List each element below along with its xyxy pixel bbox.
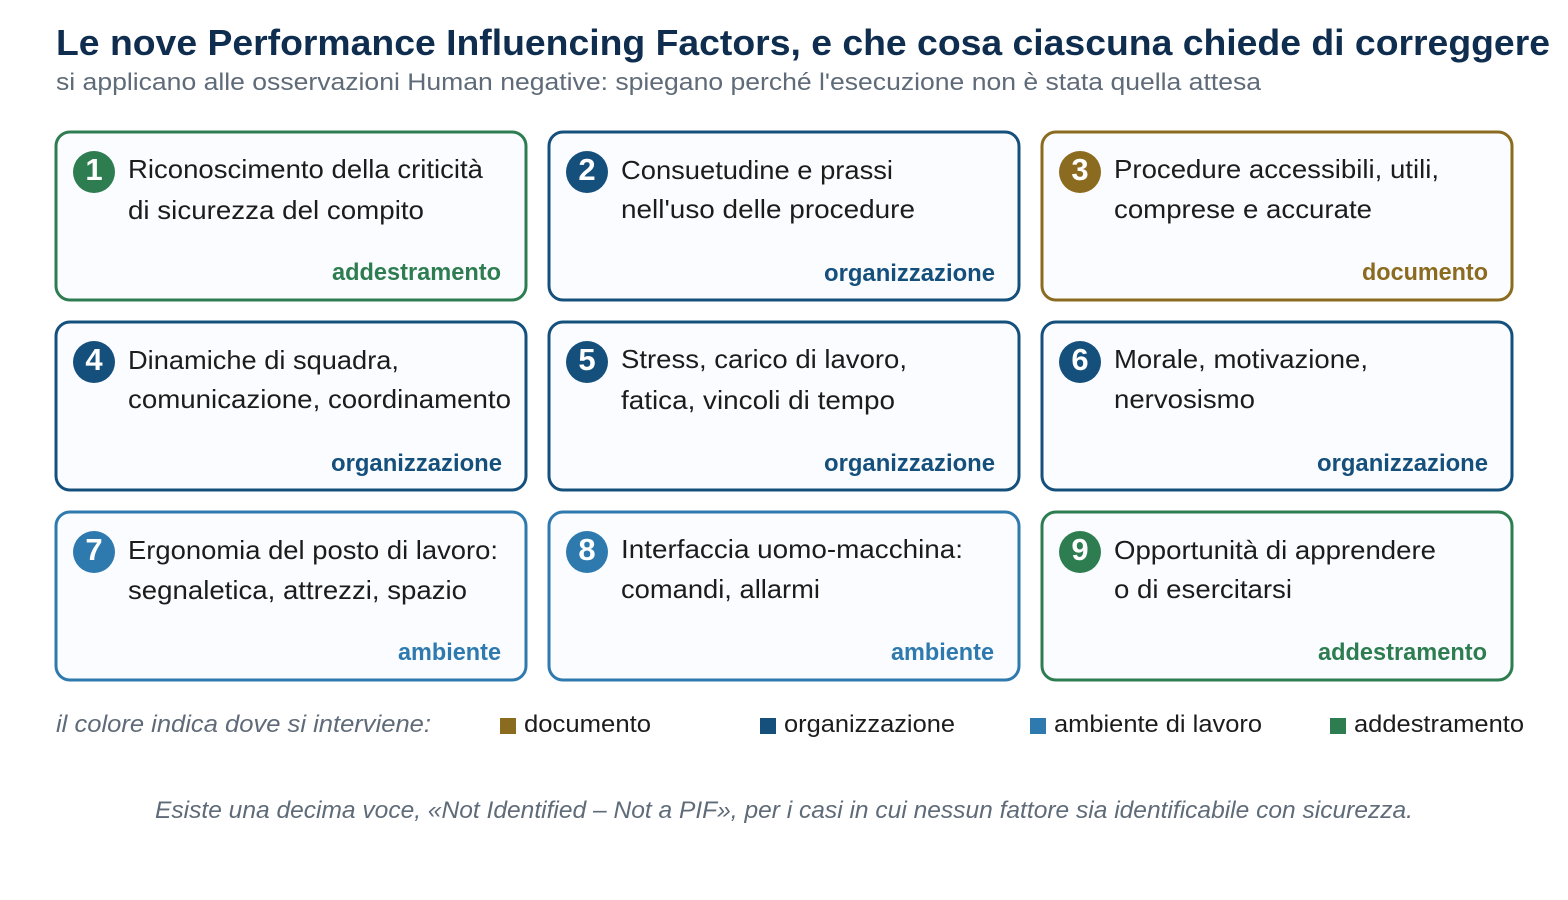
factor 2 text — [621, 155, 915, 224]
number badge 5: 5 — [578, 342, 596, 377]
factor 4 category: organizzazione — [331, 450, 502, 477]
factor 8 category: ambiente — [891, 639, 994, 666]
number badge 1 — [73, 151, 115, 193]
number badge 8: 8 — [578, 532, 596, 567]
factor 6 text — [1114, 344, 1368, 414]
factor 6 text: Morale, motivazione, — [1114, 344, 1368, 374]
legend item: organizzazione: organizzazione — [784, 711, 955, 738]
factor 9 text — [1114, 535, 1436, 604]
number badge 7 — [73, 531, 115, 573]
factor 1 text — [128, 154, 484, 225]
number badge 1: 1 — [85, 152, 103, 187]
number badge 2: 2 — [578, 152, 596, 187]
factor 1 text: Riconoscimento della criticità — [128, 154, 484, 184]
factor 3 text: comprese e accurate — [1114, 194, 1372, 224]
number badge 6: 6 — [1071, 342, 1089, 377]
factor 2 text: nell'uso delle procedure — [621, 194, 915, 224]
factor 4 text: comunicazione, coordinamento — [128, 384, 511, 414]
legend item: documento: documento — [524, 711, 651, 738]
factor 6 category: organizzazione — [1317, 450, 1488, 477]
number badge 6 — [1059, 341, 1101, 383]
panel: factor 8 — [549, 512, 1019, 680]
legend item: addestramento: addestramento — [1354, 711, 1524, 738]
factor 2 category: organizzazione — [824, 260, 995, 287]
number badge 4 — [73, 341, 115, 383]
factor 9 text: Opportunità di apprendere — [1114, 535, 1436, 565]
factor 4 text — [128, 345, 511, 414]
number badge 5 — [566, 341, 608, 383]
number badge 4: 4 — [85, 342, 103, 377]
panel: factor 2 — [549, 132, 1019, 300]
factor 9 category: addestramento — [1318, 639, 1487, 666]
factor 5 text: Stress, carico di lavoro, — [621, 344, 907, 374]
factor 5 text: fatica, vincoli di tempo — [621, 385, 895, 415]
number badge 9 — [1059, 531, 1101, 573]
factor 1 category: addestramento — [332, 259, 501, 286]
factor 7 text: Ergonomia del posto di lavoro: — [128, 535, 498, 565]
factor 3 text — [1114, 154, 1439, 224]
legend — [56, 711, 1524, 738]
factor 3 text: Procedure accessibili, utili, — [1114, 154, 1439, 184]
factor 5 category: organizzazione — [824, 450, 995, 477]
number badge 9: 9 — [1071, 532, 1089, 567]
panel: factor 9 — [1042, 512, 1512, 680]
factor 8 text — [621, 534, 963, 604]
number badge 2 — [566, 151, 608, 193]
legend item: ambiente di lavoro: ambiente di lavoro — [1054, 711, 1262, 738]
factor 6 text: nervosismo — [1114, 384, 1255, 414]
factor 7 text: segnaletica, attrezzi, spazio — [128, 575, 467, 605]
number badge 8 — [566, 531, 608, 573]
title: Le nove Performance Influencing Factors, e che cosa ciascuna chiede di correggere — [56, 22, 1550, 63]
factor 5 text — [621, 344, 907, 415]
factor 9 text: o di esercitarsi — [1114, 574, 1292, 604]
panel: factor 6 — [1042, 322, 1512, 490]
factor 4 text: Dinamiche di squadra, — [128, 345, 399, 375]
legend caption: il colore indica dove si interviene: — [56, 711, 431, 738]
panel: factor 1 — [56, 132, 526, 300]
number badge 3: 3 — [1071, 152, 1089, 187]
number badge 3 — [1059, 151, 1101, 193]
panel: factor 7 — [56, 512, 526, 680]
factor 2 text: Consuetudine e prassi — [621, 155, 893, 185]
factor 7 category: ambiente — [398, 639, 501, 666]
panel: factor 4 — [56, 322, 526, 490]
number badge 7: 7 — [85, 532, 103, 567]
panel: factor 3 — [1042, 132, 1512, 300]
factor 3 category: documento — [1362, 259, 1488, 286]
panel: factor 5 — [549, 322, 1019, 490]
subtitle: si applicano alle osservazioni Human negative: spiegano perché l'esecuzione non è stata quella attesa — [56, 69, 1262, 96]
factor 8 text: comandi, allarmi — [621, 574, 820, 604]
factor 1 text: di sicurezza del compito — [128, 195, 424, 225]
factor 8 text: Interfaccia uomo-macchina: — [621, 534, 963, 564]
footnote: Esiste una decima voce, «Not Identified – Not a PIF», per i casi in cui nessun fattore sia identificabile con sicurezza. — [155, 797, 1413, 824]
factor 7 text — [128, 535, 498, 605]
